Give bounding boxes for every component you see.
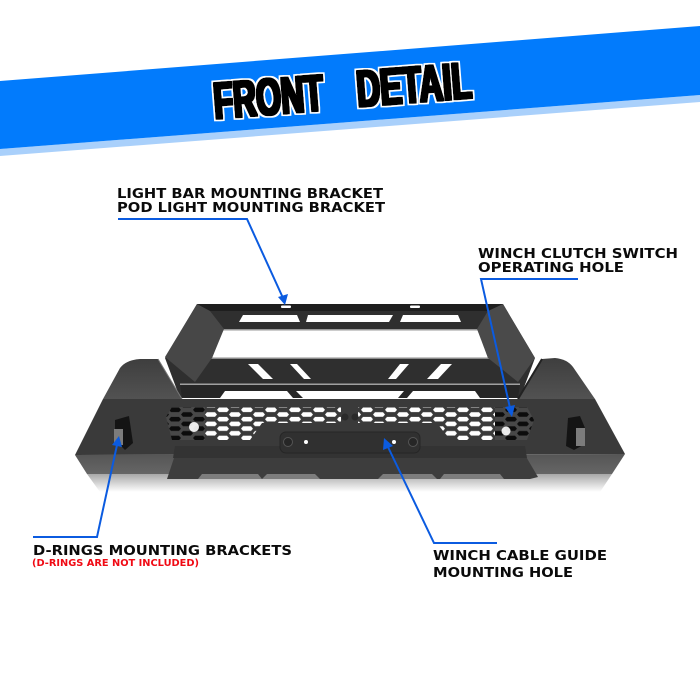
callout: winch cable guide: [383, 438, 607, 581]
right d-ring bracket: [566, 416, 585, 450]
upper light bar frame: [165, 304, 535, 398]
callout: winch clutch switch: [478, 246, 678, 417]
title banner: [0, 26, 700, 156]
arrow: to clutch switch hole: [481, 279, 578, 417]
callout: winch clutch switch: WINCH CLUTCH SWITCH: [478, 246, 678, 262]
hex mesh right: [358, 407, 534, 440]
callout: d-rings mounting brackets: [32, 436, 292, 569]
callout: light bar mounting bracket: LIGHT BAR MOUNTING BRACKET: [117, 186, 384, 202]
winch plate: [280, 414, 420, 453]
left d-ring bracket: [114, 416, 133, 450]
hex mesh left: [166, 407, 341, 440]
bumper product image: [75, 304, 625, 492]
arrow: to cable guide hole: [383, 438, 497, 543]
centre lower panel: [167, 455, 538, 479]
callout: winch clutch switch: OPERATING HOLE: [478, 260, 624, 276]
callout: light bar mounting bracket: POD LIGHT MOUNTING BRACKET: [117, 200, 386, 216]
callout: d-rings mounting brackets: D-RINGS MOUNTING BRACKETS: [33, 543, 292, 559]
arrow: to light bar bracket: [118, 219, 288, 305]
bumper main body: [75, 399, 625, 455]
bumper wings: [103, 359, 182, 399]
title: FRONT DETAIL: FRONT: [211, 65, 326, 131]
mounting slot holes upper row: [239, 306, 461, 379]
callout: d-rings mounting brackets: (D-RINGS ARE NOT INCLUDED): [32, 558, 199, 569]
callout: winch cable guide: MOUNTING HOLE: [433, 565, 573, 581]
callout: winch cable guide: WINCH CABLE GUIDE: [433, 548, 607, 564]
callout: light bar mounting bracket: [117, 186, 386, 305]
arrow: to d-ring bracket: [33, 436, 122, 537]
title: FRONT DETAIL: DETAIL: [354, 52, 474, 119]
title: FRONT DETAIL: [211, 52, 474, 131]
